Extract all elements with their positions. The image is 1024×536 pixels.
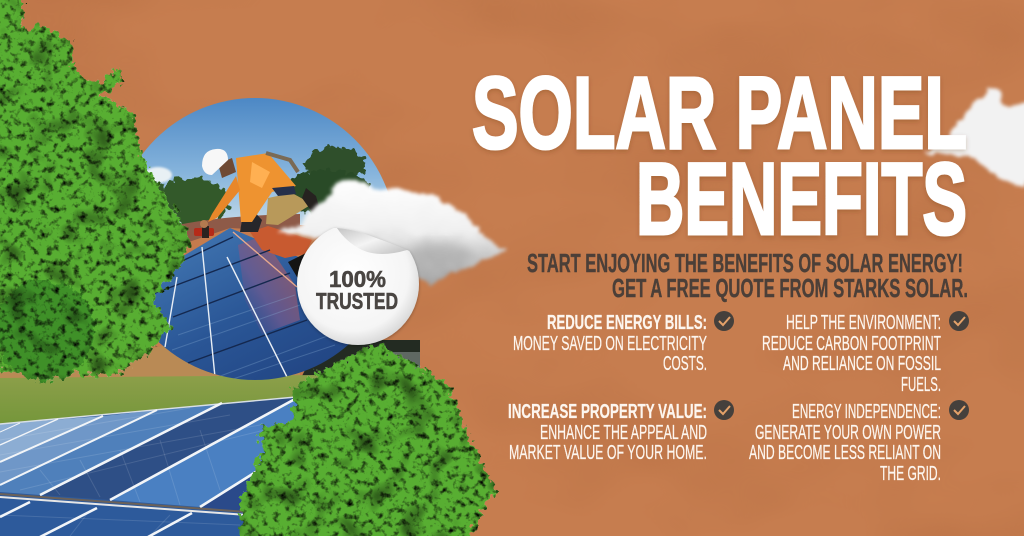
peeled corner (337, 228, 407, 254)
benefit: increase property value: ENHANCE THE APPEAL AND (540, 421, 707, 444)
title (472, 56, 967, 256)
roof ridge (182, 214, 300, 242)
benefit: increase property value: MARKET VALUE OF YOUR HOME. (509, 441, 707, 464)
sky (142, 98, 388, 225)
benefit: help the environment (762, 311, 941, 396)
grass field (0, 375, 318, 424)
panel grid (150, 232, 335, 380)
worker (194, 149, 321, 238)
hillside behind field (0, 345, 300, 380)
solar array (0, 396, 298, 536)
photo: lower field with solar array (0, 340, 420, 536)
photo: circular worker on roof (142, 98, 388, 380)
tree: left foreground (0, 0, 192, 380)
benefit: help the environment: FUELS. (901, 373, 941, 396)
icon: check increase property value (714, 400, 734, 420)
benefit: energy independence: THE GRID. (880, 462, 941, 485)
orange roof glare (250, 226, 312, 258)
benefit: increase property value: INCREASE PROPERTY VALUE: (508, 400, 707, 423)
cloud soft shading (406, 243, 474, 267)
cloud: centre (280, 180, 508, 281)
benefit: reduce energy bills: COSTS. (663, 352, 707, 375)
distant cloud (144, 167, 172, 183)
hand (200, 220, 208, 228)
tree top corner foliage (0, 0, 19, 44)
drill (194, 228, 214, 236)
sticker disc (297, 223, 419, 345)
sticker text: 100% (329, 266, 386, 292)
benefit: reduce energy bills: REDUCE ENERGY BILLS: (547, 311, 707, 334)
panel reflection (238, 236, 300, 334)
benefit: reduce energy bills: MONEY SAVED ON ELECTRICITY (513, 332, 707, 355)
benefit: reduce energy bills (513, 311, 707, 375)
sticker text (316, 266, 398, 314)
cloud: top right (925, 88, 1024, 184)
legs (266, 194, 308, 225)
icon: check help the environment (949, 311, 969, 331)
sticker text: TRUSTED (316, 288, 398, 314)
background palms and trees (150, 147, 371, 226)
torso (236, 153, 296, 222)
roof panels (152, 228, 349, 380)
array frame rail (0, 494, 247, 512)
benefit: energy independence (749, 400, 941, 485)
icon: check energy independence (949, 400, 969, 420)
harness and belt (266, 153, 298, 172)
dark trees behind sticker (302, 340, 420, 376)
grey distance patch (393, 352, 420, 369)
sticker: 100% trusted (297, 223, 419, 345)
helmet (202, 149, 228, 175)
dark gap under roof edge (288, 253, 306, 278)
face (218, 158, 236, 178)
benefit: increase property value (508, 400, 707, 464)
subtitle (527, 248, 968, 303)
arm (208, 176, 240, 222)
boot (302, 188, 318, 212)
icon: check reduce energy bills (714, 311, 734, 331)
tree: lower centre (240, 343, 497, 536)
